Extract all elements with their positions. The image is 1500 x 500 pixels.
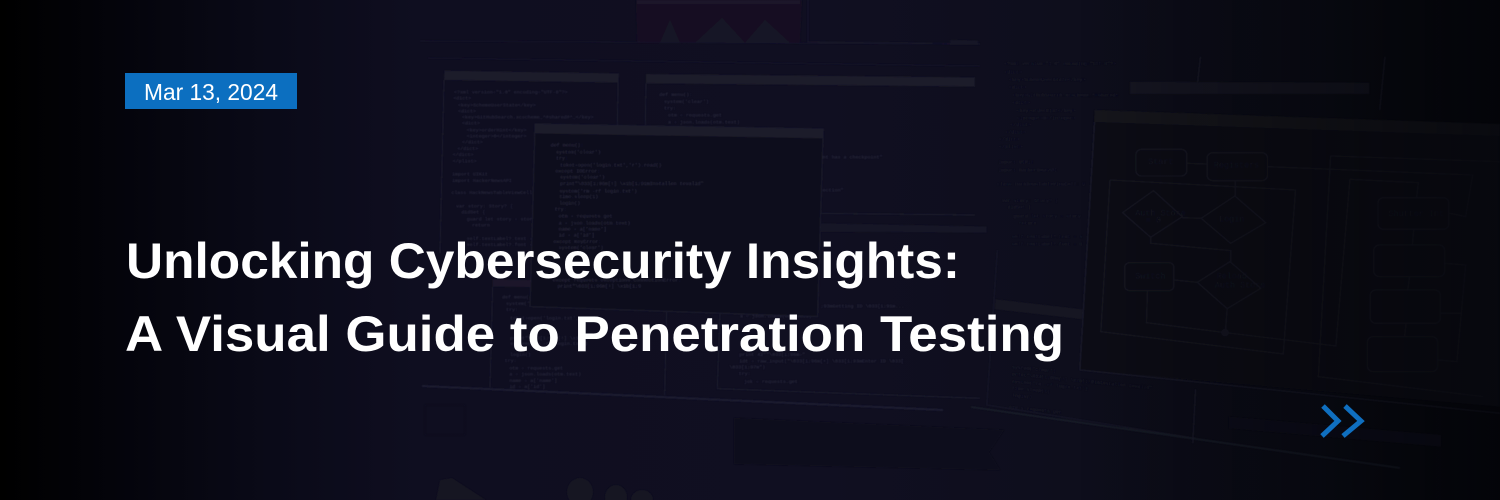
background: left code window: </plist> xyxy=(453,158,477,164)
date badge xyxy=(125,73,297,109)
background: center code window: print"\033[1;96m[!] \x1b[1;91mInstallen tevalid" xyxy=(560,181,704,187)
background: center code window: except requests.exceptions.ConnectionError: xyxy=(553,278,681,284)
title: Unlocking Cybersecurity Insights: xyxy=(126,233,960,289)
background: flowchart window: Login xyxy=(1219,215,1244,225)
background: left code window: return xyxy=(472,223,490,229)
title: A Visual Guide to Penetration Testing xyxy=(125,306,1064,362)
background: right far code window: <integer>0</integer> xyxy=(1017,115,1076,121)
background: flowchart window: Switch xyxy=(1135,271,1166,281)
background: center code window: id = a['id'] xyxy=(559,232,595,238)
background: right far code window: <?xml version="1.0" encoding="UTF-8"?> xyxy=(1004,61,1116,67)
background: center code window: try: xyxy=(556,156,568,162)
background: left code window: var story: Story? { xyxy=(456,203,513,209)
background: right far code window xyxy=(950,40,1196,438)
background: right far code window: var story: Story? { xyxy=(1002,198,1058,204)
background: lower left code window: system('rm -rf login.txt') xyxy=(510,341,588,347)
background: left code window: <dict> xyxy=(462,121,480,127)
background: left code window: import HackerNewsAPI xyxy=(452,178,512,184)
background: lower left code window: name = a['name'] xyxy=(509,378,557,384)
background: top monitors xyxy=(420,0,980,66)
background: lower right code window: ;93mGetting ID \033[1;91m... xyxy=(821,303,904,309)
background: top right code window: try: xyxy=(664,105,676,111)
date badge: Mar 13, 2024 xyxy=(144,79,278,105)
background: lower left code window: otm = requests.get xyxy=(509,365,563,371)
background: lower left code window: id = a['id'] xyxy=(509,384,545,390)
background: desk scene xyxy=(420,0,1500,500)
background: right far code window: <key>GitHubSearch.xcscheme_^#shared# xyxy=(1012,93,1118,99)
background: hand and keyboard shapes xyxy=(436,478,653,500)
background: top right code window: a = json.loads(otm.text) xyxy=(668,119,740,125)
background: flowchart window: Shutter Int xyxy=(1389,209,1444,219)
background: lower left code window: system('clear') xyxy=(506,301,551,307)
background: flowchart window: Start xyxy=(1148,158,1174,167)
background: top right code window: ection" xyxy=(823,187,844,193)
background: right far code window: didSet { xyxy=(1008,205,1031,211)
background: center code window: name = a['name'] xyxy=(559,226,607,232)
background: left code window: import UIKit xyxy=(452,171,488,177)
background: left code window: <dict> xyxy=(458,108,476,114)
background: lower right code window: a = json.loads(otm.text) xyxy=(740,314,812,320)
background: center code window: system('rm -rf login.txt') xyxy=(559,188,637,194)
background: lower left code window: def menu(): xyxy=(502,294,535,300)
background: lower right code window: \033[1;97m") xyxy=(729,364,765,370)
background: lower right code window: print 42*"\033[1;96m=" xyxy=(739,352,805,358)
background: left code window: <?xml version="1.0" encoding="UTF-8"?> xyxy=(454,89,568,95)
background: flowchart window: Auth Store xyxy=(1215,280,1265,290)
background: right far code window: </plist> xyxy=(999,144,1023,150)
background: left code window: <key>orderHint</key> xyxy=(467,127,526,133)
background: center code window: def menu(): xyxy=(551,143,584,149)
background: lower right code window: idt = raw_input("\033[1;96m[+] \033[1;93mEnter ID \033[ xyxy=(739,358,904,364)
background: top right code window: otm = requests.get xyxy=(668,113,722,119)
background: right far code window: self.textLabel?.text = s xyxy=(1012,234,1082,240)
background: left code window: self.textLabel?.text = s xyxy=(467,236,538,242)
background: center code window: print"\033[1;96m[!] \x1b[1;9 xyxy=(557,283,641,289)
background: left code window: </dict> xyxy=(462,140,483,146)
background: right far code window: otm = requests.get xyxy=(1009,404,1062,416)
background: lower left code window: login() xyxy=(510,352,531,358)
background: right far code window: <dict> xyxy=(1004,69,1022,75)
background: right far code window: time.sleep(1) xyxy=(1012,385,1050,395)
background: flowchart window: = 0 xyxy=(1146,217,1161,226)
background: left code window: self.textLabel?.font = U xyxy=(467,242,538,248)
background: left code window: guard let story = story xyxy=(467,217,535,223)
background: left code window xyxy=(440,71,618,253)
background: top right code window: nt has a checkpoint" xyxy=(823,154,882,160)
background: left code window: didSet { xyxy=(461,209,485,215)
background: center code window: time.sleep(1) xyxy=(559,194,598,200)
background: right far code window: print"\033[1;96m[!] \x1b[1;91mInstallen tevalid" xyxy=(1012,371,1153,391)
background: center code window: system('clear') xyxy=(559,245,604,251)
background: right far code window: <dict> xyxy=(1009,85,1027,91)
background: right far code window: self.textLabel?.font = U xyxy=(1012,241,1082,247)
background: right far code window: <dict> xyxy=(1012,100,1030,106)
background: center code window: otm = requests.get xyxy=(559,214,612,220)
background: lower left code window: try: xyxy=(505,358,517,364)
background: right far code window: return xyxy=(1019,221,1037,227)
background: center code window: except IOError: xyxy=(555,168,600,174)
background: left code window: </dict> xyxy=(457,146,478,152)
background: flowchart window xyxy=(1080,57,1500,447)
background: top right code window xyxy=(645,74,975,215)
background: center code window: try: xyxy=(555,206,567,212)
background: flowchart window: Registers xyxy=(1214,161,1259,170)
background: left code window: <key>SchemeUserState</key> xyxy=(458,102,536,108)
background: center code window: login() xyxy=(559,200,580,206)
background: right far code window: <key>SchemeUserState</key> xyxy=(1009,77,1086,83)
background: lower left code window: toket=open('login.txt', xyxy=(510,315,579,321)
background: center code window: system('clear') xyxy=(560,175,605,181)
background: center code window: toket=open('login.txt','r').read() xyxy=(560,163,662,169)
icon: double chevron arrow xyxy=(1322,406,1361,436)
background: right far code window: guard let story = story xyxy=(1013,213,1081,219)
background: right far code window: system('clear') xyxy=(1012,364,1056,375)
background: right far code window: import HackerNewsAPI xyxy=(998,167,1057,173)
background: right far code window: import UIKit xyxy=(998,159,1034,165)
background: lower left code window: print"\033[1;96m[!] \x1b[1; xyxy=(510,335,591,341)
background: center code window: except KeyError: xyxy=(553,239,601,245)
background: right far code window: class HackNewsTableViewCell: U xyxy=(997,181,1085,187)
background: right far code window: </dict> xyxy=(1005,129,1026,135)
background: left code window: <integer>0</integer> xyxy=(467,134,526,140)
background: lower right code window xyxy=(717,223,987,398)
background: right far code window: </dict> xyxy=(1010,122,1031,128)
background: right far code window: login() xyxy=(1012,393,1033,401)
background: center code window: a = json.loads(otm.text) xyxy=(559,220,630,226)
background: right far code window: </dict> xyxy=(999,137,1020,143)
background: lower right code window: jok = requests.get xyxy=(744,379,798,385)
background: flowchart window: Reload xyxy=(1217,271,1247,281)
title xyxy=(125,233,1064,362)
background: lower left code window: try: xyxy=(506,307,518,313)
background: center code window xyxy=(530,124,823,317)
background: lower left code window: a = json.loads(otm.text) xyxy=(509,372,581,378)
background: right far code window: <key>orderHint</key> xyxy=(1017,108,1076,114)
background: lower right code window: try: xyxy=(739,371,751,377)
background: top right code window: system('clear') xyxy=(664,99,709,105)
background: left code window: </dict> xyxy=(453,152,474,158)
background: lower left code window xyxy=(490,279,667,395)
background: left code window: <key>GitHubSearch.xcscheme_^#shared#^_</key> xyxy=(462,115,594,121)
background: left code window: <dict> xyxy=(453,95,471,101)
background: top right code window: def menu(): xyxy=(659,92,692,98)
background: right far code window: system('rm -rf login.txt') xyxy=(1012,379,1088,392)
background: flowchart window: Auth Store xyxy=(1135,208,1186,218)
background: left code window: class HackNewsTableViewCell: U xyxy=(451,190,541,196)
background: center code window: system('clear') xyxy=(556,149,601,155)
background: monitor bottom edge xyxy=(422,386,1400,470)
